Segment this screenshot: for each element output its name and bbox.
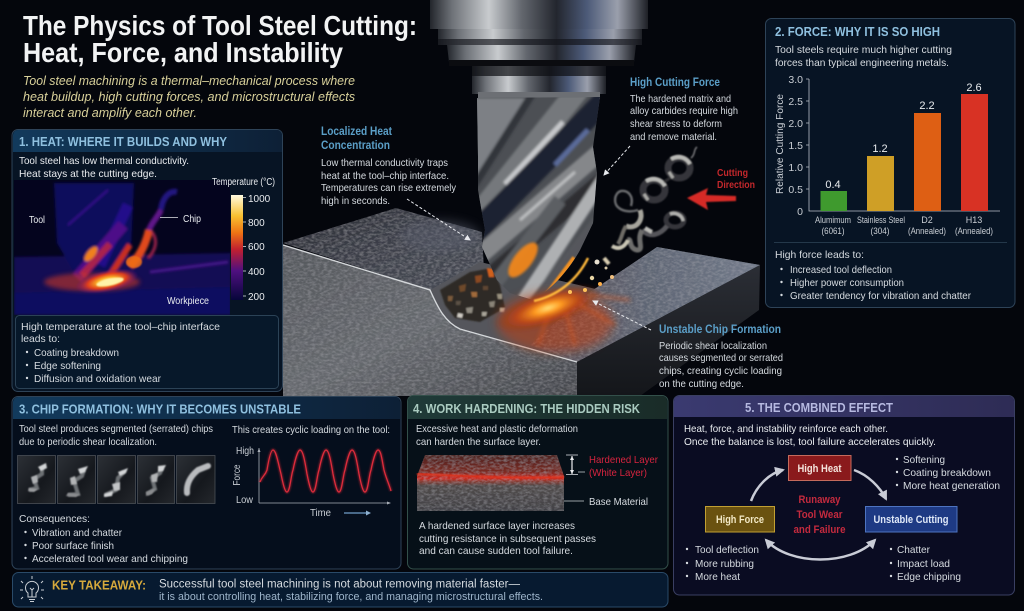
workpiece block [283, 208, 760, 396]
icon: light bulb [20, 576, 44, 602]
callout: localized heat concentration [321, 126, 457, 207]
label: workpiece: Workpiece [167, 296, 209, 307]
arrow: cutting direction [687, 188, 736, 210]
temperature colour scale: 400 [248, 267, 265, 278]
bar chart: relative cutting force: (304) [870, 226, 890, 236]
label: runaway: Runaway [798, 494, 841, 506]
temperature colour scale: 1000 [248, 194, 271, 205]
bar chart: relative cutting force: 1.5 [788, 140, 803, 152]
arrow: force callout to tool [604, 146, 630, 175]
label: key takeaway: KEY TAKEAWAY: [52, 578, 146, 592]
inner box: heat effects: Edge softening [34, 360, 101, 372]
arrow: instability and force [766, 540, 875, 560]
inner box: heat effects [16, 316, 278, 388]
heading: heat: 1. HEAT: WHERE IT BUILDS AND WHY [19, 134, 227, 149]
label: chip with leader: Chip [183, 214, 201, 225]
temperature colour scale: 800 [248, 218, 265, 229]
callout: high cutting force: shear stress to deform [630, 118, 722, 130]
text: chip intro [19, 423, 213, 448]
box: high heat [788, 456, 851, 480]
force vs time chart [231, 424, 391, 519]
title: Heat, Force, and Instability [23, 37, 343, 68]
text: heat intro [19, 155, 189, 180]
text: heat intro: Tool steel has low thermal conductivity. [19, 155, 189, 167]
callout: localized heat concentration: high in seconds. [321, 195, 390, 207]
bar chart: relative cutting force: 2.5 [788, 96, 803, 108]
callout: unstable chip formation: chips, creating cyclic loading [659, 365, 782, 377]
text: hardening intro: can harden the surface layer. [416, 436, 541, 448]
label: tool: Tool [29, 215, 45, 226]
temperature colour scale [212, 177, 275, 303]
text: takeaway: Successful tool steel machining is not about removing material faster— [159, 578, 520, 590]
callout: high cutting force: The hardened matrix and [630, 93, 731, 105]
subtitle: heat buildup, high cutting forces, and microstructural effects [23, 90, 355, 104]
force vs time chart: High [236, 445, 254, 457]
text: consequences: Poor surface finish [32, 540, 114, 552]
feedback loop [706, 456, 957, 560]
text: takeaway: it is about controlling heat, stabilizing force, and managing microstructural effects. [159, 591, 543, 603]
text: combined intro: Once the balance is lost, tool failure accelerates quickly. [684, 436, 936, 448]
callout: unstable chip formation: Periodic shear localization [659, 340, 767, 352]
temperature colour scale: Temperature (°C) [212, 177, 275, 188]
text: force effects [775, 249, 971, 302]
text: hardening consequence: and can cause sudden tool failure. [419, 545, 573, 557]
callout: high cutting force: alloy carbides require high [630, 105, 738, 117]
box: high force [706, 506, 774, 532]
subtitle: interact and amplify each other. [23, 106, 197, 120]
callout: unstable chip formation: causes segmented or serrated [659, 352, 783, 364]
text: chip intro: due to periodic shear localization. [19, 436, 157, 448]
subtitle [23, 74, 355, 120]
text: force effects: High force leads to: [775, 249, 864, 261]
bar chart: relative cutting force: D2 [921, 215, 933, 225]
text: force intro: Tool steels require much higher cutting [775, 44, 952, 56]
central illustration: end mill cutting workpiece [283, 0, 760, 396]
callout: localized heat concentration: heat at the tool–chip interface. [321, 170, 449, 182]
list: heat effects: Softening [903, 454, 945, 466]
callout: high cutting force: High Cutting Force [630, 77, 720, 89]
bar chart: relative cutting force: 2.0 [788, 118, 803, 130]
bar chart: relative cutting force: 1.0 [788, 162, 803, 174]
box: high force: High Force [716, 514, 764, 526]
inner box: heat effects: Diffusion and oxidation wear [34, 373, 161, 385]
heading: chip formation [13, 397, 400, 419]
arrow: heat callout to interface [407, 199, 470, 240]
inner box: heat effects: leads to: [21, 333, 60, 345]
bar chart: relative cutting force: (Annealed) [908, 226, 946, 236]
callout: localized heat concentration: Low thermal conductivity traps [321, 157, 448, 169]
labels: layers [589, 454, 658, 508]
bar chart: relative cutting force: 0.5 [788, 184, 803, 196]
label: chip with leader [160, 214, 201, 225]
heading: work hardening: 4. WORK HARDENING: THE HIDDEN RISK [413, 401, 641, 416]
arrow: heat to instability [854, 470, 886, 499]
temperature colour scale: 600 [248, 242, 265, 253]
bar chart: relative cutting force: 3.0 [788, 74, 803, 86]
label: cutting direction: Direction [717, 180, 755, 191]
list: instability effects: Edge chipping [897, 571, 961, 583]
temperature colour scale: 200 [248, 292, 265, 303]
arrow: force to heat [751, 470, 783, 501]
material cross-section [417, 455, 585, 511]
label: runaway [794, 494, 846, 536]
list: heat effects [896, 454, 1000, 492]
text: force effects: Higher power consumption [790, 277, 904, 289]
bar chart: relative cutting force [775, 74, 1000, 236]
inner box: heat effects: Coating breakdown [34, 347, 119, 359]
spindle holder [430, 0, 648, 99]
list: force effects: More heat [695, 571, 740, 583]
panel: combined effect [674, 396, 1014, 595]
force vs time chart: Time [310, 507, 331, 519]
subtitle: Tool steel machining is a thermal–mechanical process where [23, 74, 355, 88]
heading: force: 2. FORCE: WHY IT IS SO HIGH [775, 24, 940, 39]
panel: work hardening [408, 396, 668, 569]
callout: unstable chip formation [659, 324, 783, 390]
label: cutting direction [717, 168, 755, 191]
list: heat effects: More heat generation [903, 480, 1000, 492]
label: cutting direction: Cutting [717, 168, 748, 179]
box: unstable cutting [866, 506, 957, 532]
list: force effects [686, 544, 759, 583]
rubble in slot [440, 268, 505, 322]
arrow: chip callout to cutting zone [593, 301, 651, 330]
box: high heat: High Heat [798, 463, 842, 475]
bar chart: relative cutting force: (Annealed) [955, 226, 993, 236]
callout: localized heat concentration: Temperatures can rise extremely [321, 182, 457, 194]
text: consequences: Consequences: [19, 513, 90, 525]
bar chart: relative cutting force: Stainless Steel [857, 215, 905, 225]
text: force intro: forces than typical engineering metals. [775, 57, 949, 69]
list: force effects: Tool deflection [695, 544, 759, 556]
callout: localized heat concentration: Localized Heat [321, 126, 392, 138]
list: instability effects: Impact load [897, 558, 950, 570]
text: hardening intro: Excessive heat and plastic deformation [416, 423, 578, 435]
text: hardening consequence: A hardened surface layer increases [419, 520, 575, 532]
thermal map [14, 180, 231, 315]
callout: unstable chip formation: on the cutting edge. [659, 378, 744, 390]
text: combined intro [684, 423, 936, 448]
panel: force [766, 18, 1015, 308]
list: instability effects [890, 544, 961, 583]
text: consequences [19, 513, 188, 565]
labels: layers: Base Material [589, 496, 648, 508]
chip micrographs [18, 456, 215, 504]
callout: high cutting force [630, 77, 738, 143]
label: runaway: Tool Wear [796, 509, 843, 521]
text: force effects: Greater tendency for vibration and chatter [790, 290, 971, 302]
list: force effects: More rubbing [695, 558, 754, 570]
inner box: heat effects: High temperature at the tool–chip interface [21, 321, 220, 333]
callout: high cutting force: and remove material. [630, 131, 717, 143]
title [23, 10, 417, 68]
text: chip intro: Tool steel produces segmented (serrated) chips [19, 423, 213, 435]
label: runaway: and Failure [794, 524, 846, 536]
bar chart: relative cutting force: 2.6 [966, 82, 982, 94]
labels: layers: (White Layer) [589, 467, 647, 479]
force vs time chart: Force [231, 464, 243, 486]
text: hardening consequence: cutting resistance in subsequent passes [419, 533, 596, 545]
bar chart: relative cutting force: Relative Cutting Force [775, 94, 786, 194]
heading: combined effect [674, 396, 1014, 417]
callout: localized heat concentration: Concentration [321, 140, 390, 152]
force vs time chart: This creates cyclic loading on the tool: [232, 424, 390, 436]
heading: heat [13, 130, 282, 152]
curled chips [604, 147, 697, 264]
bar chart: relative cutting force: 0 [797, 206, 803, 218]
bar chart: relative cutting force: (6061) [822, 226, 845, 236]
heat glow at the cutting zone [489, 258, 630, 352]
list: instability effects: Chatter [897, 544, 930, 556]
text: force effects: Increased tool deflection [790, 264, 892, 276]
text: consequences: Accelerated tool wear and chipping [32, 553, 188, 565]
bar chart: relative cutting force: 2.2 [919, 100, 935, 112]
labels: layers: Hardened Layer [589, 454, 658, 466]
bar chart: relative cutting force: H13 [966, 215, 982, 225]
bar chart: relative cutting force: Alumimum [815, 215, 851, 225]
title: The Physics of Tool Steel Cutting: [23, 10, 417, 41]
callout: unstable chip formation: Unstable Chip Formation [659, 324, 781, 336]
text: hardening intro [416, 423, 578, 448]
panel: heat [12, 130, 282, 392]
bar chart: relative cutting force: 0.4 [825, 179, 841, 191]
text: hardening consequence [419, 520, 596, 557]
force vs time chart: Low [236, 494, 253, 506]
text: heat intro: Heat stays at the cutting edge. [19, 168, 157, 180]
text: combined intro: Heat, force, and instability reinforce each other. [684, 423, 888, 435]
heading: combined effect: 5. THE COMBINED EFFECT [745, 400, 893, 415]
box: unstable cutting: Unstable Cutting [874, 514, 948, 526]
list: heat effects: Coating breakdown [903, 467, 991, 479]
heading: chip formation: 3. CHIP FORMATION: WHY IT BECOMES UNSTABLE [19, 402, 301, 416]
heading: work hardening [408, 396, 667, 419]
panel: chip formation [12, 396, 401, 569]
text: consequences: Vibration and chatter [32, 527, 122, 539]
panel: key takeaway [12, 572, 668, 607]
fluted end mill [477, 97, 600, 299]
text: takeaway [159, 578, 543, 603]
text: force intro [775, 44, 952, 69]
bar chart: relative cutting force: 1.2 [872, 143, 888, 155]
